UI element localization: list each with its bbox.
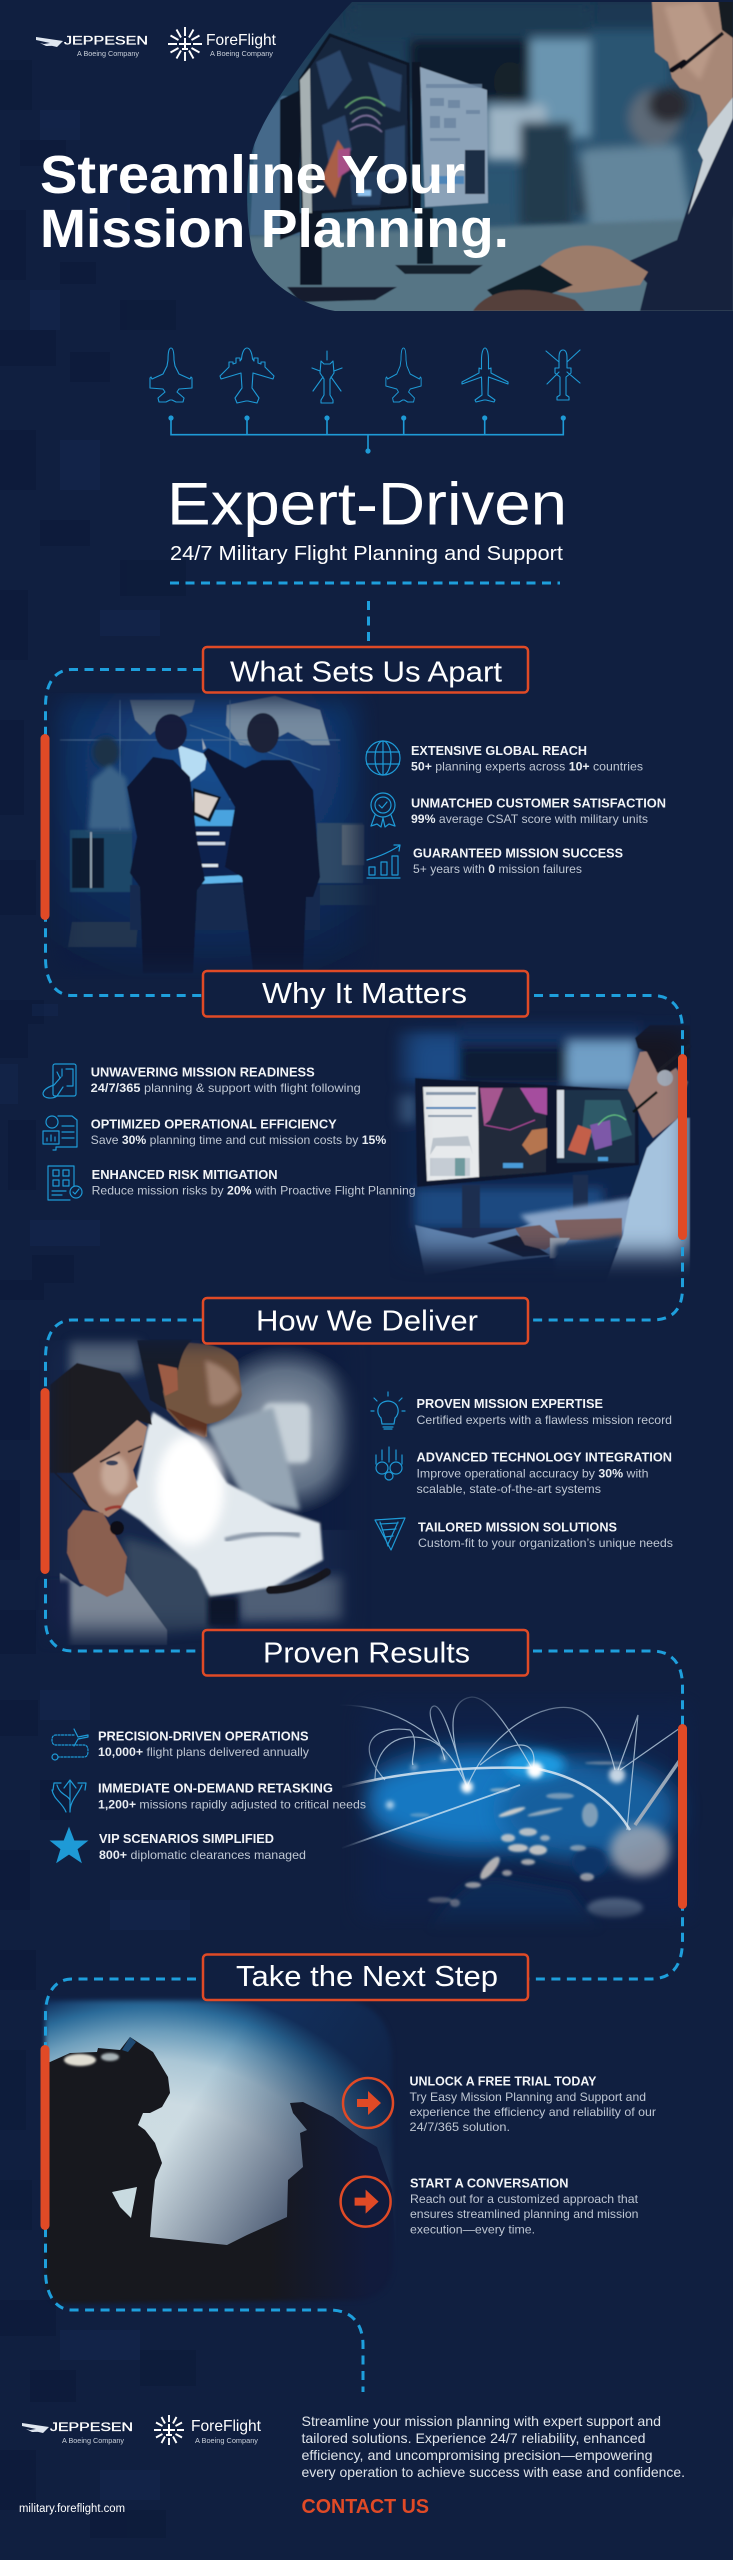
icon: helicopter <box>312 351 342 403</box>
closing paragraph: efficiency, and uncompromising precision—empowering <box>302 2447 652 2463</box>
panel: Proven Results list: 1,200+ missions rapidly adjusted to critical needs <box>98 1798 366 1812</box>
photo: pilot silhouette <box>40 1995 400 2320</box>
section: Why It Matters path <box>533 996 687 1320</box>
aircraft icon row <box>150 348 580 403</box>
icon: fighter jet two <box>386 348 421 402</box>
panel: Why It Matters list: UNWAVERING MISSION READINESS <box>91 1065 315 1080</box>
panel: Proven Results list: VIP SCENARIOS SIMPLIFIED <box>99 1831 274 1846</box>
flight arcs <box>340 1697 680 1830</box>
photo: two planners at world map <box>48 693 378 978</box>
section: Proven Results path <box>528 1651 687 1979</box>
closing paragraph: Streamline your mission planning with expert support and <box>302 2413 661 2429</box>
icon: technology brain gears <box>376 1447 402 1480</box>
desk <box>414 1196 630 1270</box>
panel: What Sets Us Apart list: 50+ planning experts across 10+ countries <box>411 760 643 774</box>
dashed divider <box>170 583 560 646</box>
icon: transport aircraft <box>220 348 274 403</box>
heading: Expert-Driven: Expert-Driven <box>167 470 567 538</box>
tablet <box>193 788 221 822</box>
logos: Jeppesen and ForeFlight (header): JEPPESEN <box>64 34 148 48</box>
panel: Why It Matters list <box>43 1064 416 1200</box>
figure: man <box>202 713 320 970</box>
heading box: Why It Matters: Why It Matters <box>262 978 467 1010</box>
figure: woman <box>127 714 205 973</box>
panel: What Sets Us Apart list: UNMATCHED CUSTOMER SATISFACTION <box>411 796 666 810</box>
logos: Jeppesen and ForeFlight (header): ForeFlight <box>206 32 277 49</box>
panel: What Sets Us Apart list: GUARANTEED MISSION SUCCESS <box>413 846 623 860</box>
title: Streamline Your <box>40 145 465 205</box>
icon: light bulb <box>371 1392 405 1429</box>
contact us: CONTACT US <box>302 2496 429 2518</box>
panel: Take the Next Step list: Reach out for a customized approach that <box>410 2192 639 2206</box>
heading box: Proven Results <box>203 1630 528 1676</box>
icon: business jet <box>462 348 508 402</box>
heading box: Proven Results: Proven Results <box>263 1637 470 1669</box>
panel: Proven Results list <box>51 1728 366 1862</box>
panel: What Sets Us Apart list: 5+ years with 0 mission failures <box>413 862 582 876</box>
icon: growth chart <box>367 845 400 878</box>
photo: operator at monitors <box>390 1015 690 1290</box>
panel: How We Deliver list <box>371 1392 673 1550</box>
panel: Take the Next Step list: UNLOCK A FREE TRIAL TODAY <box>410 2073 597 2088</box>
panel: Why It Matters list: ENHANCED RISK MITIGATION <box>92 1167 278 1182</box>
panel: Proven Results list: 800+ diplomatic clearances managed <box>99 1848 306 1862</box>
icon: arrow circle one <box>343 2078 393 2128</box>
icon: star <box>51 1828 87 1862</box>
panel: Why It Matters list: OPTIMIZED OPERATIONAL EFFICIENCY <box>91 1117 337 1132</box>
icon: attack helicopter <box>546 350 580 400</box>
heading box: Why It Matters <box>203 971 528 1016</box>
section: How We Deliver path <box>40 1320 202 1651</box>
glowing nodes <box>386 1755 625 1809</box>
logos: Jeppesen and ForeFlight (footer) <box>22 2415 262 2445</box>
panel: Proven Results list: IMMEDIATE ON-DEMAND RETASKING <box>98 1781 333 1796</box>
photo: woman and man on headsets <box>50 1338 354 1645</box>
panel: Proven Results list: PRECISION-DRIVEN OPERATIONS <box>98 1728 309 1743</box>
heading box: Take the Next Step <box>203 1954 528 2000</box>
heading box: What Sets Us Apart: What Sets Us Apart <box>230 657 502 689</box>
website link: military.foreflight.com <box>19 2503 125 2515</box>
right monitor <box>547 1085 639 1175</box>
panel: Take the Next Step list: 24/7/365 solution. <box>410 2120 510 2134</box>
icon: hand on tablet <box>43 1064 76 1098</box>
heading: Expert-Driven <box>167 470 567 565</box>
hero photo: mission planners at monitors <box>240 0 733 320</box>
icon: risk checklist <box>48 1166 82 1200</box>
panel: What Sets Us Apart list: 99% average CSAT score with military units <box>411 812 648 826</box>
left monitor <box>415 1078 547 1187</box>
keyboard and hands <box>487 1235 550 1257</box>
logos: Jeppesen and ForeFlight (footer): A Boeing Company <box>195 2436 258 2445</box>
panel: Take the Next Step list: experience the efficiency and reliability of our <box>410 2105 656 2119</box>
logos: Jeppesen and ForeFlight (footer): A Boeing Company <box>62 2436 124 2445</box>
title: Mission Planning. <box>40 199 509 259</box>
panel: Take the Next Step list: START A CONVERSATION <box>410 2175 568 2190</box>
closing paragraph: every operation to achieve success with ease and confidence. <box>302 2464 685 2480</box>
panel: What Sets Us Apart list <box>366 741 666 878</box>
city lights <box>410 1762 625 1907</box>
panel: How We Deliver list: TAILORED MISSION SOLUTIONS <box>418 1519 617 1534</box>
panel: Why It Matters list: Save 30% planning time and cut mission costs by 15% <box>91 1133 387 1147</box>
panel: How We Deliver list: Improve operational accuracy by 30% with <box>416 1467 648 1481</box>
woman operator <box>473 0 733 311</box>
panel: Proven Results list: 10,000+ flight plans delivered annually <box>98 1745 309 1759</box>
logos: Jeppesen and ForeFlight (header) <box>36 27 277 61</box>
icon: fighter jet <box>150 348 192 402</box>
logos: Jeppesen and ForeFlight (header): A Boeing Company <box>210 49 273 58</box>
heading box: How We Deliver <box>203 1298 528 1344</box>
panel: Why It Matters list: 24/7/365 planning & support with flight following <box>91 1081 361 1095</box>
man <box>120 1340 327 1627</box>
heading: Expert-Driven: 24/7 Military Flight Planning and Support <box>170 542 563 565</box>
panel: How We Deliver list: ADVANCED TECHNOLOGY INTEGRATION <box>416 1450 672 1465</box>
closing paragraph <box>302 2413 685 2480</box>
heading box: How We Deliver: How We Deliver <box>256 1306 478 1338</box>
panel: Take the Next Step list: ensures streamlined planning and mission <box>410 2207 638 2221</box>
icon: globe <box>366 741 400 775</box>
panel: How We Deliver list: Custom-fit to your organization’s unique needs <box>418 1536 673 1550</box>
panel: Why It Matters list: Reduce mission risks by 20% with Proactive Flight Planning <box>92 1184 416 1198</box>
icon: rosette <box>371 793 395 827</box>
icon: ruler and pencil <box>375 1518 405 1550</box>
photo: globe with flight arcs <box>340 1690 700 1930</box>
section: What Sets Us Apart path <box>40 670 202 996</box>
icon: diverging arrows <box>52 1780 86 1812</box>
panel: How We Deliver list: scalable, state-of-the-art systems <box>416 1482 601 1496</box>
panel: Take the Next Step list: Try Easy Mission Planning and Support and <box>410 2090 646 2104</box>
heading box: What Sets Us Apart <box>203 647 528 692</box>
panel: Take the Next Step list <box>341 2073 656 2236</box>
logos: Jeppesen and ForeFlight (header): A Boeing Company <box>77 49 139 58</box>
section: Take the Next Step path <box>40 1979 363 2392</box>
icon: arrow circle two <box>341 2177 391 2227</box>
title <box>40 145 509 259</box>
icon: flight route <box>52 1729 88 1760</box>
panel: How We Deliver list: Certified experts with a flawless mission record <box>416 1413 672 1427</box>
icon: document with chart <box>43 1116 77 1150</box>
monitor stands <box>462 1185 480 1229</box>
logos: Jeppesen and ForeFlight (footer): JEPPESEN <box>50 2420 133 2434</box>
connector bracket <box>169 416 565 453</box>
woman <box>40 1363 167 1650</box>
panel: How We Deliver list: PROVEN MISSION EXPERTISE <box>416 1396 603 1411</box>
logos: Jeppesen and ForeFlight (footer): ForeFlight <box>191 2418 262 2435</box>
heading box: Take the Next Step: Take the Next Step <box>236 1961 498 1993</box>
panel: What Sets Us Apart list: EXTENSIVE GLOBAL REACH <box>411 743 587 758</box>
man <box>610 1025 690 1272</box>
closing paragraph: tailored solutions. Experience 24/7 reliability, enhanced <box>302 2430 646 2446</box>
panel: Take the Next Step list: execution—every time. <box>410 2222 535 2236</box>
